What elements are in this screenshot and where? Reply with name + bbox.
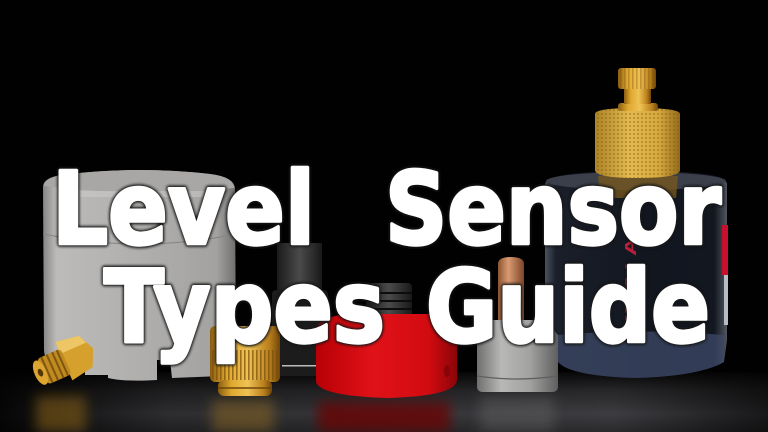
sensor: gold angled fitting: [26, 329, 102, 393]
floor reflections: [36, 396, 554, 432]
title shadow: Sensor: [385, 150, 722, 268]
sensor: silver cylinder with copper tip: [477, 257, 558, 392]
title text: [52, 150, 722, 366]
title text: Sensor: [385, 150, 722, 268]
title: [52, 150, 722, 366]
title text: Level: [52, 150, 315, 268]
title shadow: Types: [104, 248, 385, 366]
title shadow: [52, 150, 722, 366]
sensor: glass bottle with gold cap: [545, 68, 728, 378]
sensor: black stem cylinder: [272, 243, 328, 376]
title text: Guide: [426, 248, 710, 366]
sensor: white cylindrical housing: [43, 170, 236, 381]
sensor: red puck: [316, 314, 457, 398]
title shadow: Guide: [426, 248, 710, 366]
sensor: gold knurled fitting: [210, 326, 280, 396]
title shadow: Level: [52, 150, 315, 268]
sensor: glass bottle with gold cap: INT I ABT: [623, 200, 640, 322]
sensor: black threaded top: [366, 283, 412, 327]
title text: Types: [104, 248, 385, 366]
